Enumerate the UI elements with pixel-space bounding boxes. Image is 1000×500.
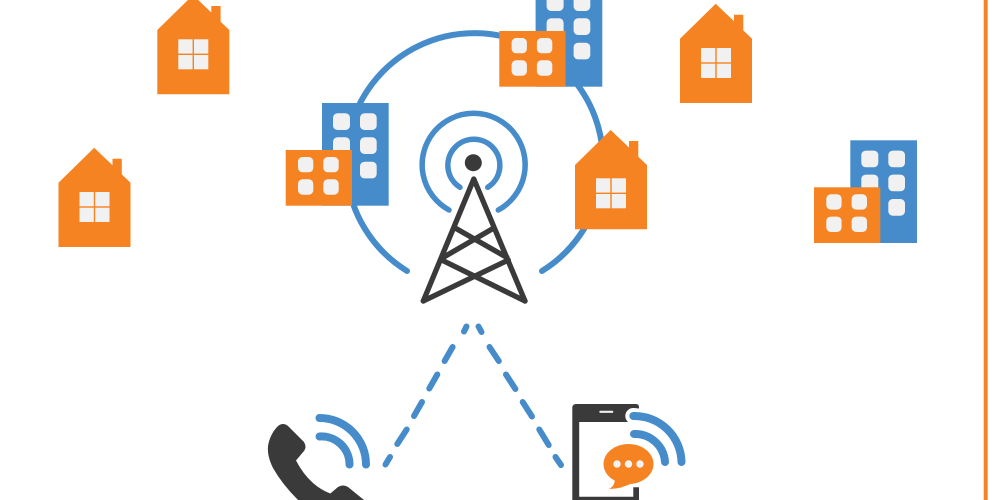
house: centre right	[575, 130, 647, 229]
house: top left	[157, 0, 229, 94]
building: top centre	[499, 0, 602, 87]
house: top right	[680, 4, 752, 103]
divider: right edge line	[984, 0, 988, 500]
dashed link: tower to telephone	[386, 326, 466, 464]
house: far left	[58, 148, 130, 247]
building: left of tower	[286, 103, 389, 206]
icon: radio tower	[423, 154, 525, 301]
icon: telephone signal waves	[320, 418, 366, 464]
coverage circle arc	[346, 33, 603, 271]
dashed link: tower to smartphone	[478, 326, 561, 465]
building: far right	[814, 140, 917, 243]
icon: smartphone signal waves	[633, 410, 682, 462]
icon: signal waves above tower	[422, 113, 525, 210]
icon: chat bubble	[604, 444, 654, 489]
icon: telephone handset	[268, 424, 364, 500]
icon: smartphone	[572, 404, 639, 500]
